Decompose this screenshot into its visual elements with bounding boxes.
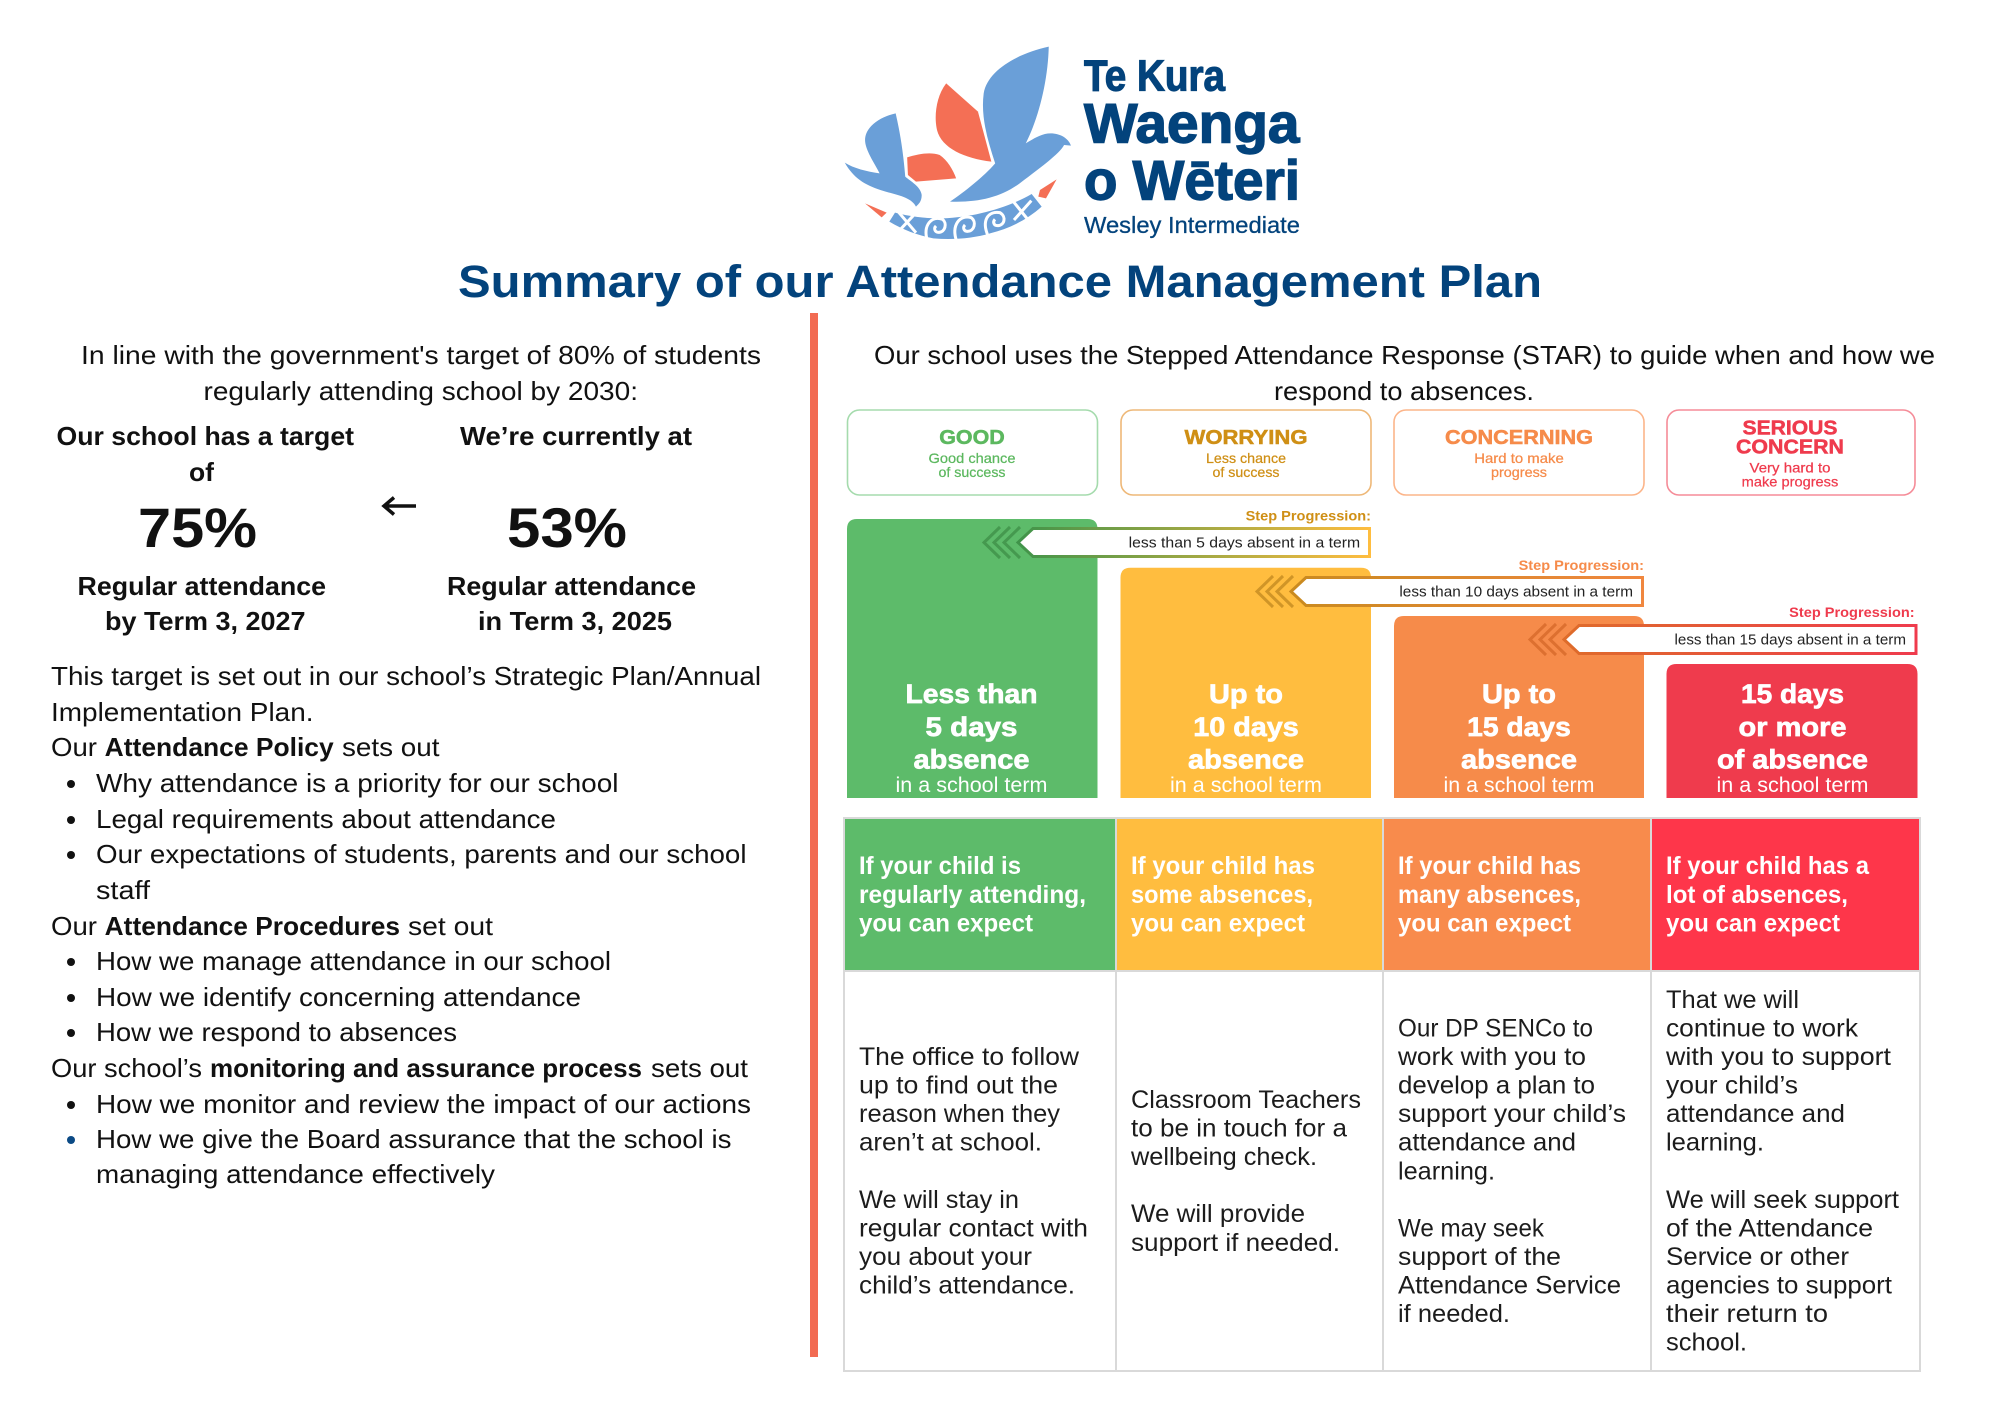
column: regularly attending: regularly attending, (859, 881, 1086, 909)
step bar: orange: Up to (1482, 679, 1556, 709)
status card: concerning: progress (1491, 464, 1547, 480)
column: many absences: We may seek (1398, 1214, 1544, 1242)
status card: concerning (1394, 410, 1644, 495)
column: a lot of absences (1651, 818, 1920, 1357)
column: some absences: to be in touch for a (1131, 1115, 1347, 1143)
step bar: red: 15 days (1741, 679, 1844, 709)
logo text: o Wēteri (1084, 148, 1300, 211)
current stat: 53% (507, 496, 627, 559)
column: some absences: Classroom Teachers (1131, 1086, 1361, 1114)
step bar: orange: in a school term (1444, 774, 1594, 797)
attendance policy list: Our (51, 732, 97, 762)
step bar: yellow (1120, 568, 1371, 798)
column: a lot of absences: school. (1666, 1329, 1747, 1357)
step bar: red (1666, 664, 1918, 798)
column: some absences: We will provide (1131, 1200, 1305, 1228)
column: a lot of absences: of the Attendance (1666, 1214, 1873, 1242)
column: a lot of absences: their return to (1666, 1300, 1828, 1328)
column: a lot of absences: lot of absences, (1666, 881, 1848, 909)
step progression callout: 10 days: Step Progression: (1519, 557, 1644, 573)
current stat: We’re currently at (460, 421, 692, 451)
column: a lot of absences: learning. (1666, 1129, 1764, 1157)
column: a lot of absences: Service or other (1666, 1243, 1849, 1271)
arrow (384, 498, 416, 514)
status card: concerning: Hard to make (1474, 450, 1564, 466)
status card: serious concern: SERIOUS (1742, 418, 1838, 440)
column: a lot of absences: We will seek support (1666, 1186, 1899, 1214)
monitoring and assurance list: Our school’s (51, 1053, 202, 1083)
step bar: yellow: absence (1188, 745, 1304, 775)
intro text: In line with the government's target of 80% of students (81, 340, 761, 370)
target note: This target is set out in our school’s Strategic Plan/Annual (51, 661, 761, 691)
step bar: red: or more (1738, 712, 1846, 742)
target note (51, 661, 761, 727)
step bar: red: of absence (1717, 745, 1868, 775)
status card: worrying: Less chance (1206, 450, 1286, 466)
column: some absences: wellbeing check. (1130, 1143, 1317, 1171)
step bar: green (847, 519, 1098, 798)
column: many absences: learning. (1398, 1157, 1495, 1185)
current stat: Regular attendance (447, 571, 696, 601)
monitoring and assurance list: How we monitor and review the impact of our actions (96, 1089, 751, 1119)
column: regularly attending: We will stay in (859, 1186, 1019, 1214)
logo text: Waenga (1084, 92, 1300, 155)
column: a lot of absences: attendance and (1666, 1100, 1845, 1128)
attendance procedures list: Attendance Procedures (105, 911, 400, 941)
current stat: in Term 3, 2025 (478, 606, 672, 636)
status card: serious concern: CONCERN (1736, 437, 1844, 459)
attendance procedures list: How we respond to absences (96, 1017, 457, 1047)
column: some absences: you can expect (1131, 910, 1306, 938)
status card: good: of success (938, 464, 1006, 480)
logo emblem: nest (865, 179, 1057, 241)
status card: concerning: CONCERNING (1445, 427, 1593, 449)
attendance procedures list: Our (51, 911, 97, 941)
column: many absences: attendance and (1398, 1129, 1576, 1157)
column: a lot of absences: with you to support (1665, 1043, 1891, 1071)
logo text: Wesley Intermediate (1084, 212, 1300, 238)
status card: worrying: of success (1212, 464, 1280, 480)
step progression callout: 10 days: less than 10 days absent in a term (1399, 585, 1633, 601)
step progression callout: 5 days (984, 508, 1371, 558)
column: regularly attending: you can expect (859, 910, 1034, 938)
column: a lot of absences: If your child has a (1666, 852, 1870, 880)
status card: serious concern: Very hard to (1750, 460, 1831, 476)
status card: serious concern: make progress (1742, 473, 1838, 489)
STAR intro: respond to absences. (1274, 376, 1534, 406)
column: regularly attending: you about your (859, 1243, 1032, 1271)
target note: Implementation Plan. (51, 697, 314, 727)
column: a lot of absences: agencies to support (1666, 1272, 1892, 1300)
column: regularly attending: If your child is (859, 852, 1021, 880)
status card: worrying (1121, 410, 1371, 495)
attendance policy list: Why attendance is a priority for our school (96, 768, 618, 798)
target stat: Regular attendance (78, 571, 326, 601)
step bar: yellow: in a school term (1170, 774, 1322, 797)
STAR intro (874, 340, 1935, 406)
panel: right column (844, 340, 1935, 1371)
status card: good: GOOD (939, 427, 1005, 449)
attendance procedures list: How we manage attendance in our school (96, 946, 611, 976)
attendance policy list: Attendance Policy (105, 732, 334, 762)
column: some absences: If your child has (1131, 852, 1315, 880)
attendance policy list: staff (96, 875, 151, 905)
column: regularly attending: up to find out the (859, 1072, 1058, 1100)
column: many absences: support your child’s (1398, 1100, 1626, 1128)
step bar: green: absence (914, 745, 1030, 775)
column: many absences: if needed. (1398, 1300, 1510, 1328)
column: many absences: support of the (1398, 1243, 1561, 1271)
step progression callout: 15 days: less than 15 days absent in a term (1674, 633, 1906, 649)
step bar: yellow: Up to (1209, 679, 1283, 709)
attendance procedures list (51, 911, 611, 1047)
column: some absences (1116, 818, 1383, 1257)
step progression callout: 5 days: Step Progression: (1246, 508, 1371, 524)
column: many absences: Our DP SENCo to (1398, 1014, 1593, 1042)
column: regularly attending: child’s attendance. (859, 1272, 1075, 1300)
attendance procedures list: set out (408, 911, 494, 941)
column: a lot of absences: your child’s (1666, 1072, 1798, 1100)
status card: good (848, 410, 1098, 495)
column: some absences: some absences, (1131, 881, 1313, 909)
panel: left column (51, 340, 761, 1189)
logo text: Te Kura (1084, 52, 1225, 101)
attendance policy list: Our expectations of students, parents and our school (96, 839, 746, 869)
step bar: yellow: 10 days (1193, 712, 1299, 742)
column: many absences: develop a plan to (1398, 1072, 1595, 1100)
step progression callout: 15 days: Step Progression: (1789, 604, 1915, 620)
STAR intro: Our school uses the Stepped Attendance Response (STAR) to guide when and how we (874, 340, 1935, 370)
step bar: green: in a school term (896, 774, 1048, 797)
step bar: orange (1394, 616, 1644, 798)
step progression callout: 10 days (1257, 557, 1644, 607)
column: many absences: you can expect (1398, 910, 1572, 938)
column: regularly attending: reason when they (859, 1100, 1061, 1128)
logo (845, 47, 1300, 241)
column: some absences: support if needed. (1131, 1229, 1340, 1257)
column: many absences: Attendance Service (1398, 1272, 1621, 1300)
status card: serious concern (1667, 410, 1915, 495)
status card: good: Good chance (928, 450, 1016, 466)
step progression callout: 15 days (1530, 604, 1916, 655)
attendance policy list: Legal requirements about attendance (96, 804, 556, 834)
column: regularly attending (844, 818, 1116, 1300)
column: regularly attending: aren’t at school. (859, 1129, 1042, 1157)
title: Summary of our Attendance Management Plan (458, 256, 1542, 307)
target stat: 75% (138, 496, 257, 559)
monitoring and assurance list: managing attendance effectively (96, 1159, 495, 1189)
expectations table (844, 818, 1920, 1371)
column: many absences (1383, 818, 1651, 1328)
target stat (56, 421, 354, 636)
step bar: red: in a school term (1716, 774, 1868, 797)
column: a lot of absences: That we will (1666, 986, 1799, 1014)
target stat: by Term 3, 2027 (105, 606, 306, 636)
step bar: orange: 15 days (1467, 712, 1571, 742)
monitoring and assurance list: sets out (651, 1053, 749, 1083)
monitoring and assurance list: How we give the Board assurance that the school is (96, 1124, 732, 1154)
step progression callout: 5 days: less than 5 days absent in a term (1129, 536, 1360, 552)
column: a lot of absences: continue to work (1666, 1014, 1859, 1042)
vertical divider (810, 313, 818, 1357)
column: regularly attending: regular contact with (859, 1214, 1088, 1242)
column: many absences: If your child has (1398, 852, 1581, 880)
column: regularly attending: The office to follow (859, 1043, 1080, 1071)
target stat: of (189, 457, 214, 487)
current stat (447, 421, 696, 636)
attendance procedures list: How we identify concerning attendance (96, 982, 581, 1012)
target stat: Our school has a target (56, 421, 354, 451)
column: many absences: work with you to (1397, 1043, 1586, 1071)
monitoring and assurance list: monitoring and assurance process (210, 1053, 642, 1083)
intro text: regularly attending school by 2030: (204, 376, 638, 406)
step bar: orange: absence (1461, 745, 1577, 775)
step bar: green: Less than (906, 679, 1038, 709)
attendance policy list: sets out (342, 732, 440, 762)
column: a lot of absences: you can expect (1666, 910, 1841, 938)
status card: worrying: WORRYING (1184, 427, 1308, 449)
intro text (81, 340, 761, 406)
logo text (1084, 52, 1300, 238)
step bar: green: 5 days (926, 712, 1018, 742)
column: many absences: many absences, (1398, 881, 1581, 909)
monitoring and assurance list (51, 1053, 751, 1189)
attendance policy list (51, 732, 746, 905)
logo emblem: birds (845, 47, 1071, 207)
